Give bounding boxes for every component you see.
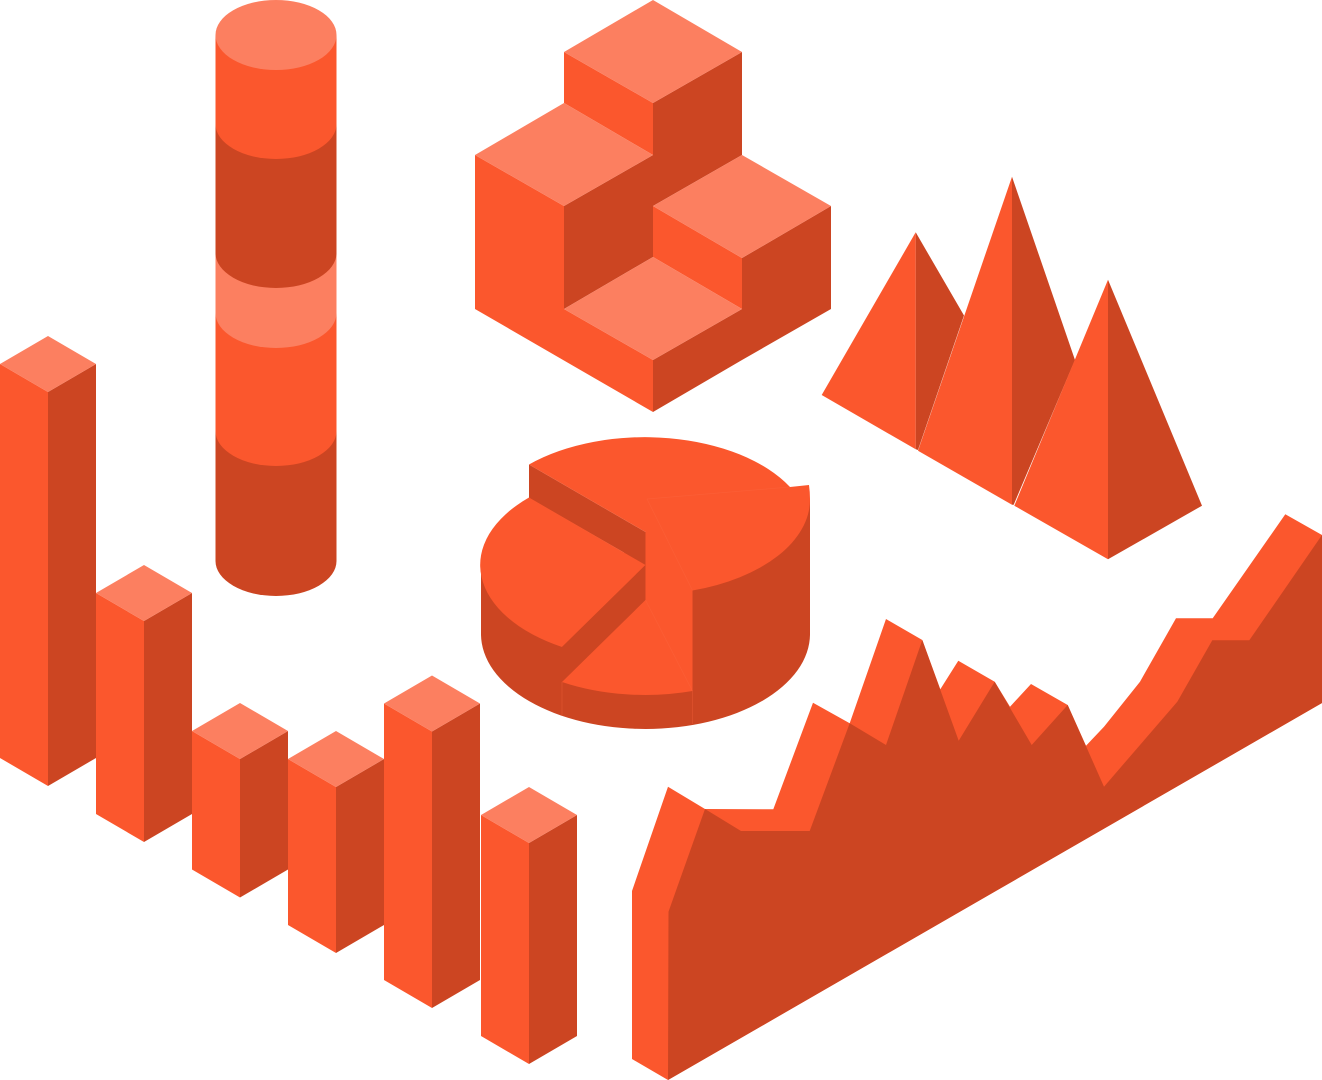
- stacked cylinder chart: [216, 0, 336, 596]
- faint slice seams: [562, 487, 790, 724]
- cylinder segment 2: [216, 124, 336, 288]
- isometric area chart: [632, 514, 1322, 1080]
- right front face: [653, 206, 742, 309]
- dark side faces: [564, 52, 742, 309]
- left top face: [475, 103, 653, 206]
- left front face: [475, 155, 653, 412]
- top slice inner wall: [529, 464, 646, 565]
- isometric bar chart: [0, 336, 577, 1064]
- bar 3: [192, 703, 288, 898]
- pyramid 3: [1014, 280, 1202, 559]
- left slice: [480, 498, 646, 647]
- pyramid chart: [822, 177, 1202, 559]
- lower top face: [564, 257, 742, 360]
- raised slices: [529, 437, 810, 695]
- cylinder segment 5: [216, 431, 336, 596]
- cylinder top: [216, 0, 336, 70]
- pyramid 2: [918, 177, 1075, 505]
- bar 4: [288, 731, 384, 953]
- upper front face: [564, 52, 653, 155]
- right top face: [653, 155, 831, 258]
- pyramid 1: [822, 232, 964, 450]
- bar 2: [96, 565, 192, 842]
- left slice inner wall: [562, 565, 646, 682]
- bar 5: [384, 676, 480, 1008]
- cylinder segment 4: [216, 313, 336, 466]
- area front face: [668, 535, 1322, 1080]
- area back ribbon: [632, 514, 1322, 1080]
- upper top face: [564, 0, 742, 103]
- isometric stepped blocks: [475, 0, 831, 412]
- pie base side: [481, 499, 810, 729]
- right side face: [653, 206, 831, 412]
- bar 6: [481, 787, 577, 1064]
- cylinder segment 1: [216, 35, 336, 159]
- cylinder segment 3: [216, 253, 336, 348]
- isometric pie chart: [480, 437, 810, 729]
- bar 1: [0, 336, 96, 786]
